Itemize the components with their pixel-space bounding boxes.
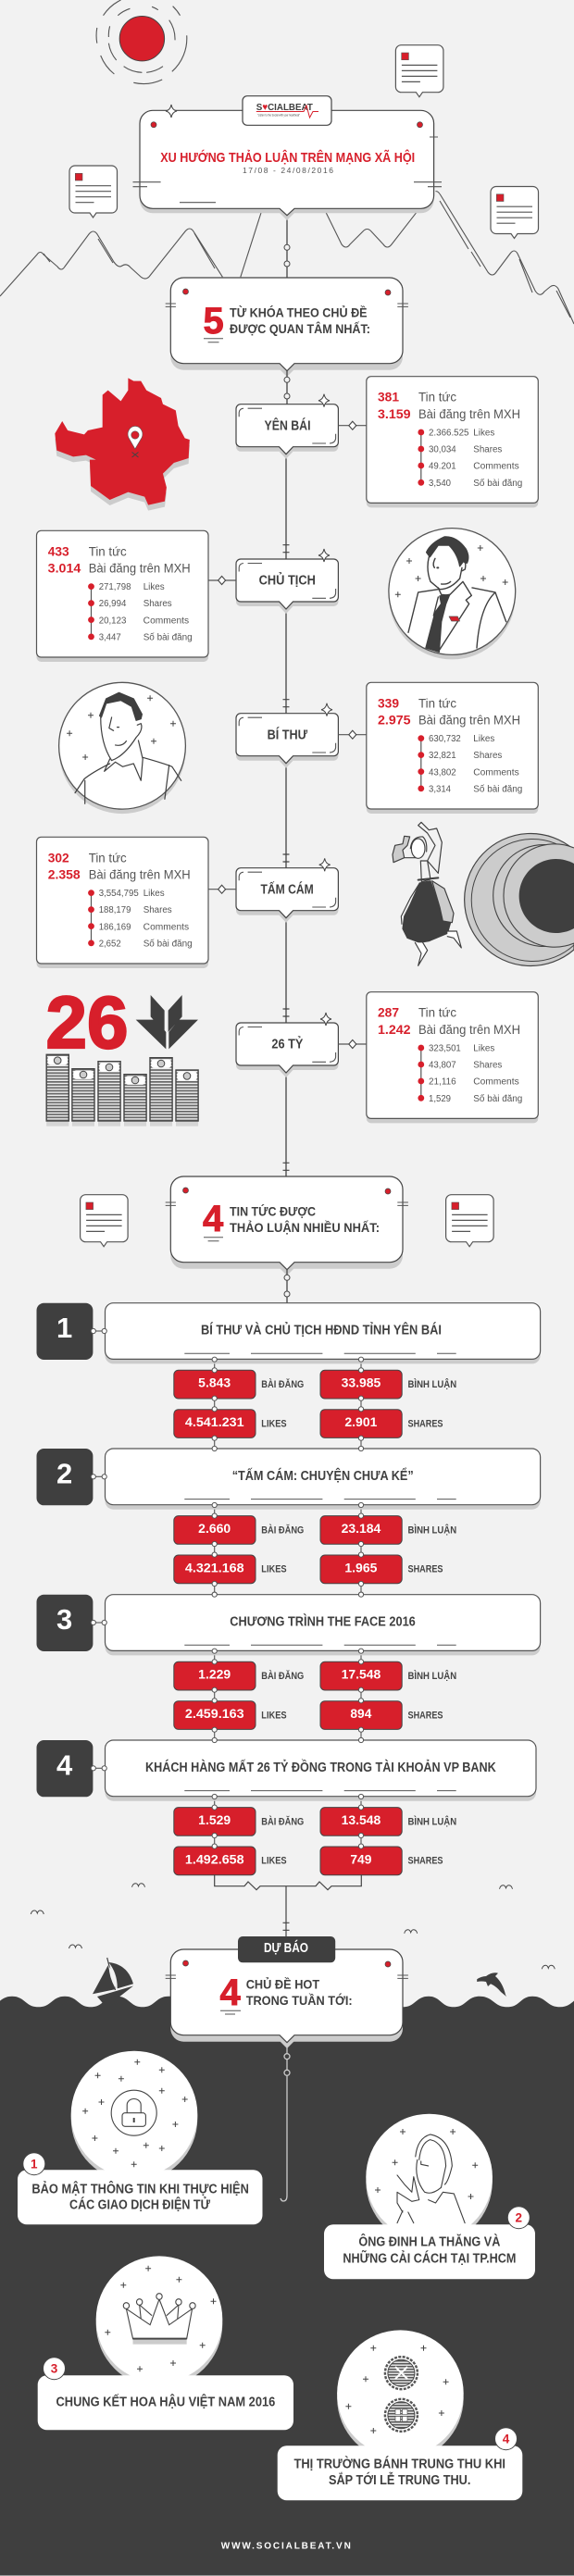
panel: news 1: BÀI ĐĂNG	[261, 1378, 304, 1390]
panel: Tấm Cám stats: 2.358	[48, 867, 81, 882]
panel: news 2: 2.660	[198, 1522, 231, 1536]
tag: forecast	[166, 1936, 408, 2048]
panel: news 1: 1	[56, 1312, 72, 1344]
panel: 26 tỷ stats: Bài đăng trên MXH	[418, 1023, 520, 1037]
panel: 26 tỷ stats: 1.242	[378, 1022, 411, 1037]
heading text: TỪ KHÓA THEO CHỦ ĐỀ	[230, 304, 368, 319]
title text: XU HƯỚNG THẢO LUẬN TRÊN MẠNG XÃ HỘI	[160, 149, 415, 166]
panel: forecast 1: 1	[31, 2157, 38, 2172]
panel: forecast 1	[18, 2051, 263, 2224]
panel: news 4: SHARES	[407, 1856, 443, 1867]
number 5: 5	[204, 301, 224, 342]
panel: forecast 1: BẢO MẬT THÔNG TIN KHI THỰC HIỆN	[31, 2180, 249, 2196]
icon: document top right	[395, 45, 443, 97]
connector: Yên Bái to stats	[338, 421, 367, 429]
panel: Tấm Cám stats: Likes	[144, 889, 165, 899]
icon: red sun	[96, 0, 187, 83]
mountains	[0, 192, 574, 324]
panel: forecast 2: NHỮNG CẢI CÁCH TẠI TP.HCM	[343, 2249, 516, 2266]
panel: Chủ tịch stats: Likes	[144, 582, 165, 592]
panel: Chủ tịch stats: Số bài đăng	[144, 631, 193, 642]
illustration: 26 billion	[46, 981, 198, 1126]
panel: 26 tỷ stats	[367, 992, 538, 1123]
panel: Bí thư stats: Số bài đăng	[473, 783, 522, 794]
connector: title to keywords	[284, 211, 290, 278]
logo: Socialbeat: S♥CIALBEAT	[256, 102, 313, 113]
portrait: Bí thư	[59, 682, 185, 814]
panel: news 2: 23.184	[342, 1522, 381, 1536]
panel: news 4: BÌNH LUẬN	[407, 1815, 456, 1827]
panel: news 2: “TẤM CÁM: CHUYỆN CHƯA KỂ”	[232, 1467, 414, 1484]
panel: 26 tỷ stats: Số bài đăng	[473, 1093, 522, 1104]
panel: news 2: SHARES	[407, 1564, 443, 1575]
panel: news 3: BÌNH LUẬN	[407, 1670, 456, 1682]
panel: news 3: 2.459.163	[185, 1707, 244, 1721]
footer: website: WWW.SOCIALBEAT.VN	[221, 2541, 351, 2551]
keyword: Bí thư: BÍ THƯ	[268, 727, 308, 742]
panel: Yên Bái stats: Shares	[473, 445, 502, 455]
panel: 26 tỷ stats: Tin tức	[418, 1006, 456, 1020]
panel: Yên Bái stats: 2.366.525	[429, 428, 469, 438]
panel: forecast 3	[38, 2256, 293, 2430]
panel: news 2: BÌNH LUẬN	[407, 1524, 456, 1536]
heading text: ĐƯỢC QUAN TÂM NHẤT:	[230, 320, 370, 336]
panel: Bí thư stats: 2.975	[378, 713, 411, 728]
panel: news 3: SHARES	[407, 1710, 443, 1721]
illustration: conical hat	[465, 834, 574, 966]
panel: news 4: LIKES	[261, 1856, 287, 1867]
panel: news 3: 1.229	[198, 1668, 231, 1682]
panel: Tấm Cám stats: Shares	[144, 905, 172, 915]
panel: news 3: CHƯƠNG TRÌNH THE FACE 2016	[230, 1614, 416, 1630]
panel: news 4: 1.529	[198, 1813, 231, 1827]
portrait: Đinh La Thăng	[397, 2134, 465, 2223]
panel: four news heading	[166, 1176, 408, 1276]
panel: news 4: 1.492.658	[185, 1852, 244, 1866]
logo: Socialbeat: "Listen to the Social with your heartbeat"	[257, 113, 301, 117]
panel: forecast 3: CHUNG KẾT HOA HẬU VIỆT NAM 2016	[56, 2393, 275, 2409]
panel: Chủ tịch stats: 3.014	[48, 561, 81, 576]
panel: news 4	[37, 1737, 536, 1875]
panel: 26 tỷ stats: 21,116	[429, 1077, 456, 1088]
panel: news 4: 749	[350, 1852, 371, 1866]
connector: news to forecast	[215, 1874, 361, 1936]
panel: four news heading: TIN TỨC ĐƯỢC	[230, 1202, 316, 1218]
panel: news 1: 2.901	[344, 1415, 378, 1429]
panel: Chủ tịch stats: Shares	[144, 599, 172, 609]
panel: news 2: LIKES	[261, 1564, 287, 1575]
panel: 26 tỷ stats: 43,807	[429, 1061, 456, 1071]
panel: news 1: 33.985	[342, 1376, 381, 1390]
panel: Bí thư stats: 339	[378, 695, 399, 710]
money stacks	[46, 1054, 198, 1126]
connector: Tấm Cám to stats	[208, 885, 236, 893]
panel: news 4: 13.548	[342, 1813, 381, 1827]
keyword: 26 tỷ: 26 TỶ	[271, 1037, 304, 1052]
panel: Yên Bái stats: 30,034	[429, 445, 456, 455]
birds	[31, 1884, 555, 1969]
keyword: Tấm Cám: TẤM CÁM	[261, 882, 314, 898]
keyword: Chủ tịch: CHỦ TỊCH	[259, 572, 316, 589]
panel: Bí thư stats: 43,802	[429, 767, 456, 778]
panel: news 1: BÌNH LUẬN	[407, 1378, 456, 1390]
icon: document right of news heading	[446, 1195, 493, 1247]
panel: news 2	[37, 1446, 541, 1597]
panel: news 1: BÍ THƯ VÀ CHỦ TỊCH HĐND TỈNH YÊN BÁI	[201, 1322, 442, 1338]
portrait: Chủ tịch	[389, 529, 516, 659]
panel: forecast 4	[278, 2330, 522, 2500]
panel: news 3: 894	[350, 1707, 372, 1721]
panel: Chủ tịch stats: Tin tức	[89, 544, 127, 558]
illustration: dancer	[393, 822, 461, 965]
panel: Chủ tịch stats: 20,123	[99, 616, 127, 626]
panel: news 3	[37, 1592, 541, 1743]
forecast heading text: TRONG TUẦN TỚI:	[246, 1992, 353, 2008]
panel: four news heading: 4	[203, 1199, 224, 1239]
panel: 26 tỷ stats: 323,501	[429, 1043, 461, 1053]
panel: forecast 2: 2	[516, 2210, 522, 2225]
panel: Tấm Cám stats: 186,169	[99, 922, 131, 932]
panel: 26 tỷ stats: Shares	[473, 1061, 502, 1071]
panel: Chủ tịch stats: 433	[48, 543, 69, 558]
panel: Yên Bái stats: 3,540	[429, 479, 451, 489]
panel: news 2: 2	[56, 1457, 72, 1489]
panel: news 1: LIKES	[261, 1418, 287, 1429]
panel: Bí thư stats: Bài đăng trên MXH	[418, 714, 520, 728]
panel: four news heading: THẢO LUẬN NHIỀU NHẤT:	[230, 1219, 380, 1235]
panel: Tấm Cám stats	[37, 837, 208, 968]
dark sea background	[0, 1997, 574, 2575]
panel: Bí thư stats: 3,314	[429, 784, 451, 794]
panel: Chủ tịch stats: Comments	[144, 616, 189, 626]
panel: Yên Bái stats: Tin tức	[418, 391, 456, 404]
panel: Yên Bái stats: Số bài đăng	[473, 478, 522, 489]
keyword: Chủ tịch	[236, 549, 338, 614]
icon: sailboat	[93, 1958, 133, 2004]
panel: five keywords heading	[166, 278, 408, 377]
panel: forecast 2	[324, 2114, 535, 2279]
panel: news 1: 5.843	[198, 1376, 231, 1390]
icon: crown	[123, 2294, 195, 2345]
connector: fish hook	[281, 2047, 290, 2201]
icon: document right	[491, 187, 539, 239]
connector: Chủ tịch to stats	[208, 576, 236, 585]
connector: 26 tỷ to stats	[338, 1040, 367, 1048]
panel: Tấm Cám stats: Comments	[144, 922, 189, 932]
panel: news 2: 4.321.168	[185, 1561, 244, 1574]
panel: news 3: BÀI ĐĂNG	[261, 1670, 304, 1682]
keyword: Yên Bái	[236, 394, 338, 459]
panel: news 2: 1.965	[344, 1561, 378, 1574]
connector: Bí thư to stats	[338, 730, 367, 739]
panel: news 4: 4	[56, 1748, 73, 1781]
date range: 17/08 - 24/08/2016	[243, 166, 333, 175]
panel: forecast 4: THỊ TRƯỜNG BÁNH TRUNG THU KHI	[294, 2456, 505, 2472]
keyword: Yên Bái: YÊN BÁI	[265, 417, 311, 433]
panel: news 1	[37, 1303, 541, 1451]
panel: forecast 3: 3	[51, 2362, 58, 2375]
panel: title	[133, 105, 442, 220]
panel: Yên Bái stats: Likes	[473, 428, 494, 438]
icon: dolphin	[477, 1972, 506, 1997]
panel: 26 tỷ stats: 1,529	[429, 1094, 451, 1104]
panel: Bí thư stats: 630,732	[429, 734, 461, 744]
panel: Chủ tịch stats: Bài đăng trên MXH	[89, 562, 191, 576]
map: Yên Bái	[55, 378, 190, 511]
panel: news 4: KHÁCH HÀNG MẤT 26 TỶ ĐỒNG TRONG TÀI KHOẢN VP BANK	[145, 1759, 496, 1775]
panel: Tấm Cám stats: 188,179	[99, 905, 131, 915]
keyword: Tấm Cám	[236, 858, 338, 923]
icon: document left	[69, 166, 117, 218]
panel: forecast 4: SẮP TỚI LỄ TRUNG THU.	[329, 2471, 470, 2488]
panel: Tấm Cám stats: Tin tức	[89, 851, 127, 865]
panel: Tấm Cám stats: 302	[48, 850, 69, 865]
panel: forecast 1: CÁC GIAO DỊCH ĐIỆN TỬ	[69, 2196, 211, 2213]
number 4: 4	[220, 1972, 241, 2013]
bottom edge strip	[0, 2575, 574, 2576]
icon: mooncakes	[385, 2357, 418, 2432]
keyword: Bí thư	[236, 703, 338, 768]
panel: 26 tỷ stats: 287	[378, 1005, 399, 1020]
panel: Chủ tịch stats: 271,798	[99, 582, 131, 592]
logo: VP Bank	[136, 995, 198, 1049]
panel: news 3: 17.548	[342, 1668, 381, 1682]
panel: Yên Bái stats	[367, 377, 538, 507]
panel: Tấm Cám stats: Bài đăng trên MXH	[89, 868, 191, 882]
panel: Tấm Cám stats: 2,652	[99, 939, 121, 949]
panel: news 3: 3	[56, 1603, 72, 1636]
panel: 26 tỷ stats: Comments	[473, 1077, 519, 1088]
panel: Bí thư stats: Tin tức	[418, 696, 456, 710]
panel: forecast 2: ÔNG ĐINH LA THĂNG VÀ	[358, 2234, 501, 2250]
panel: news 3: LIKES	[261, 1710, 287, 1721]
keyword: 26 tỷ	[236, 1013, 338, 1077]
tag: forecast: DỰ BÁO	[264, 1940, 308, 1956]
panel: news 2: BÀI ĐĂNG	[261, 1524, 304, 1536]
panel: Bí thư stats: Comments	[473, 767, 519, 778]
panel: Chủ tịch stats	[37, 530, 208, 662]
connector: main timeline	[283, 370, 290, 1176]
panel: news 1: 4.541.231	[185, 1415, 244, 1429]
logo: Socialbeat	[243, 96, 331, 125]
panel: Yên Bái stats: 49.201	[429, 462, 456, 472]
panel: news 4: BÀI ĐĂNG	[261, 1815, 304, 1827]
panel: Tấm Cám stats: 3,554,795	[99, 889, 139, 899]
panel: Bí thư stats: Likes	[473, 734, 494, 744]
number 26: 26	[46, 981, 128, 1064]
panel: Yên Bái stats: 3.159	[378, 406, 411, 421]
panel: Yên Bái stats: 381	[378, 390, 399, 404]
panel: news 1: SHARES	[407, 1418, 443, 1429]
panel: Yên Bái stats: Comments	[473, 462, 519, 472]
panel: 26 tỷ stats: Likes	[473, 1043, 494, 1053]
panel: Bí thư stats	[367, 682, 538, 814]
forecast heading text: CHỦ ĐỀ HOT	[246, 1976, 320, 1992]
connector: heading to news	[284, 1270, 290, 1303]
icon: padlock	[111, 2090, 156, 2135]
icon: document left of news heading	[81, 1195, 128, 1247]
panel: Chủ tịch stats: 26,994	[99, 599, 127, 609]
panel: forecast 4: 4	[503, 2433, 510, 2445]
panel: Chủ tịch stats: 3,447	[99, 632, 121, 642]
panel: Tấm Cám stats: Số bài đăng	[144, 938, 193, 949]
panel: Yên Bái stats: Bài đăng trên MXH	[418, 407, 520, 421]
panel: Bí thư stats: 32,821	[429, 751, 456, 761]
panel: Bí thư stats: Shares	[473, 751, 502, 761]
